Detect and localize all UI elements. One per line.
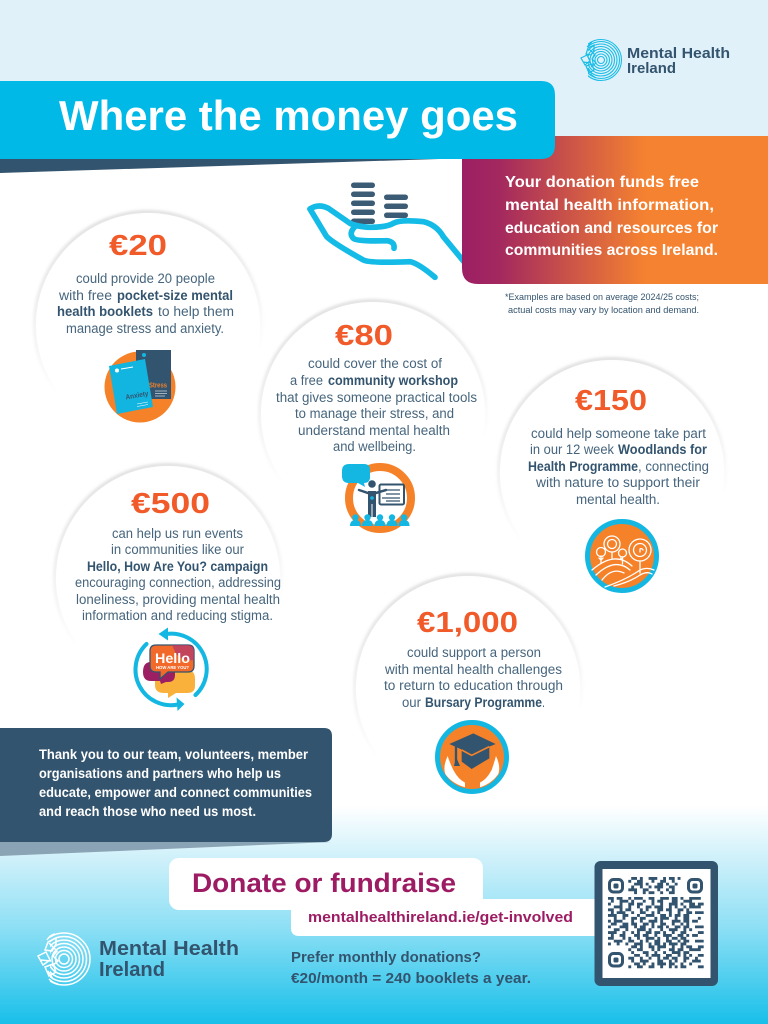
card: 80 euro: to manage their stress, and [295, 406, 454, 421]
panel: donation statement: mental health information, [505, 197, 714, 214]
icon: booklets: Stress [149, 382, 167, 390]
panel: thank you: Thank you to our team, volunteers, member [39, 747, 309, 762]
panel: donation statement: communities across Ireland. [505, 242, 718, 259]
card: 1000 euro: with mental health challenges [384, 662, 562, 677]
icon: hand holding coins [310, 182, 467, 277]
logo: Mental Health Ireland top: Mental Health [627, 45, 730, 62]
monthly donation note: Prefer monthly donations? [291, 950, 481, 966]
logo: Mental Health Ireland bottom: Mental Health [99, 937, 239, 960]
icon: woodlands [588, 522, 656, 590]
circle background: 150 euro [499, 359, 725, 585]
icon: hello how are you: Hello [155, 650, 190, 666]
icon: hello how are you: HOW ARE YOU? [156, 665, 189, 670]
card: 500 euro: in communities like our [111, 542, 244, 557]
card: 500 euro: Hello, How Are You? campaign [87, 559, 268, 574]
page background bottom gradient [0, 806, 768, 1024]
panel: donation statement: Your donation funds free [505, 174, 699, 191]
panel: thank you: educate, empower and connect communities [39, 785, 312, 800]
url box: mentalhealthireland.ie/get-involved [308, 909, 573, 926]
card: 20 euro: manage stress and anxiety. [66, 321, 224, 336]
donate heading: Donate or fundraise [192, 868, 456, 898]
footnote [505, 292, 699, 316]
card: 500 euro: €500 [131, 488, 210, 520]
page background top [0, 0, 768, 136]
logo: Mental Health Ireland bottom: Ireland [99, 958, 165, 981]
card: 150 euro: Woodlands for [618, 442, 708, 457]
card: 80 euro: community workshop [328, 373, 458, 388]
card: 150 euro [528, 385, 709, 590]
panel: thank you: organisations and partners who help us [39, 766, 281, 781]
card: 1000 euro: €1,000 [417, 607, 518, 639]
footnote: actual costs may vary by location and demand. [508, 305, 699, 316]
card: 20 euro: with free [58, 288, 112, 303]
card: 80 euro: and wellbeing. [333, 439, 416, 454]
icon: booklets [104, 350, 176, 422]
dark wedge under title [0, 158, 470, 173]
card: 80 euro: a free [290, 373, 323, 388]
QR code [594, 861, 718, 986]
card: 20 euro: to help them [158, 304, 234, 319]
card: 1000 euro: to return to education through [384, 678, 563, 693]
panel: donation statement [462, 136, 768, 284]
card: 20 euro [57, 230, 234, 422]
circle background: 500 euro [55, 465, 281, 691]
card: 150 euro: Health Programme [528, 459, 638, 474]
card: 20 euro: could provide 20 people [76, 271, 215, 286]
icon: community workshop [342, 464, 411, 529]
title banner: Where the money goes [59, 92, 518, 139]
card: 80 euro: that gives someone practical tools [276, 390, 477, 405]
card: 80 euro [276, 320, 477, 529]
card: 150 euro: with nature to support their [535, 475, 701, 490]
donate heading [169, 858, 483, 910]
panel: thank you [0, 728, 332, 856]
card: 1000 euro [384, 607, 563, 792]
url box [291, 899, 600, 936]
card: 80 euro: understand mental health [298, 423, 450, 438]
logo: Mental Health Ireland top [580, 40, 730, 80]
circle background: 80 euro [260, 301, 486, 527]
card: 1000 euro: could support a person [407, 645, 541, 660]
monthly donation note: €20/month = 240 booklets a year. [291, 971, 531, 987]
card: 500 euro: loneliness, providing mental health [76, 592, 280, 607]
card: 80 euro: could cover the cost of [308, 356, 442, 371]
card: 500 euro [75, 488, 281, 711]
card: 20 euro: €20 [109, 230, 167, 262]
card: 20 euro: health booklets [57, 304, 153, 319]
circle background: 1000 euro [355, 575, 581, 801]
card: 150 euro: €150 [575, 385, 647, 417]
monthly donation note [291, 950, 531, 987]
icon: booklets: Anxiety [125, 391, 149, 401]
card: 150 euro: in our 12 week [530, 442, 614, 457]
card: 500 euro: can help us run events [112, 526, 243, 541]
card: 80 euro: €80 [335, 320, 393, 352]
card: 150 euro: , connecting [638, 459, 709, 474]
icon: hello how are you [135, 628, 207, 711]
card: 500 euro: encouraging connection, addressing [75, 575, 281, 590]
card: 1000 euro: our [402, 695, 421, 710]
logo: Mental Health Ireland top: Ireland [627, 60, 676, 77]
card: 150 euro: mental health. [576, 492, 660, 507]
card: 1000 euro: . [542, 695, 545, 710]
logo: Mental Health Ireland bottom [38, 933, 239, 985]
card: 500 euro: information and reducing stigma. [82, 608, 273, 623]
circle background: 20 euro [35, 212, 261, 438]
title banner [0, 81, 555, 159]
panel: donation statement: education and resources for [505, 220, 718, 237]
card: 1000 euro: Bursary Programme [425, 695, 542, 710]
footnote: *Examples are based on average 2024/25 costs; [505, 292, 699, 303]
icon: graduation cap in hands [438, 722, 506, 792]
card: 20 euro: pocket-size mental [117, 288, 233, 303]
panel: thank you: and reach those who need us most. [39, 804, 256, 819]
card: 150 euro: could help someone take part [531, 426, 706, 441]
